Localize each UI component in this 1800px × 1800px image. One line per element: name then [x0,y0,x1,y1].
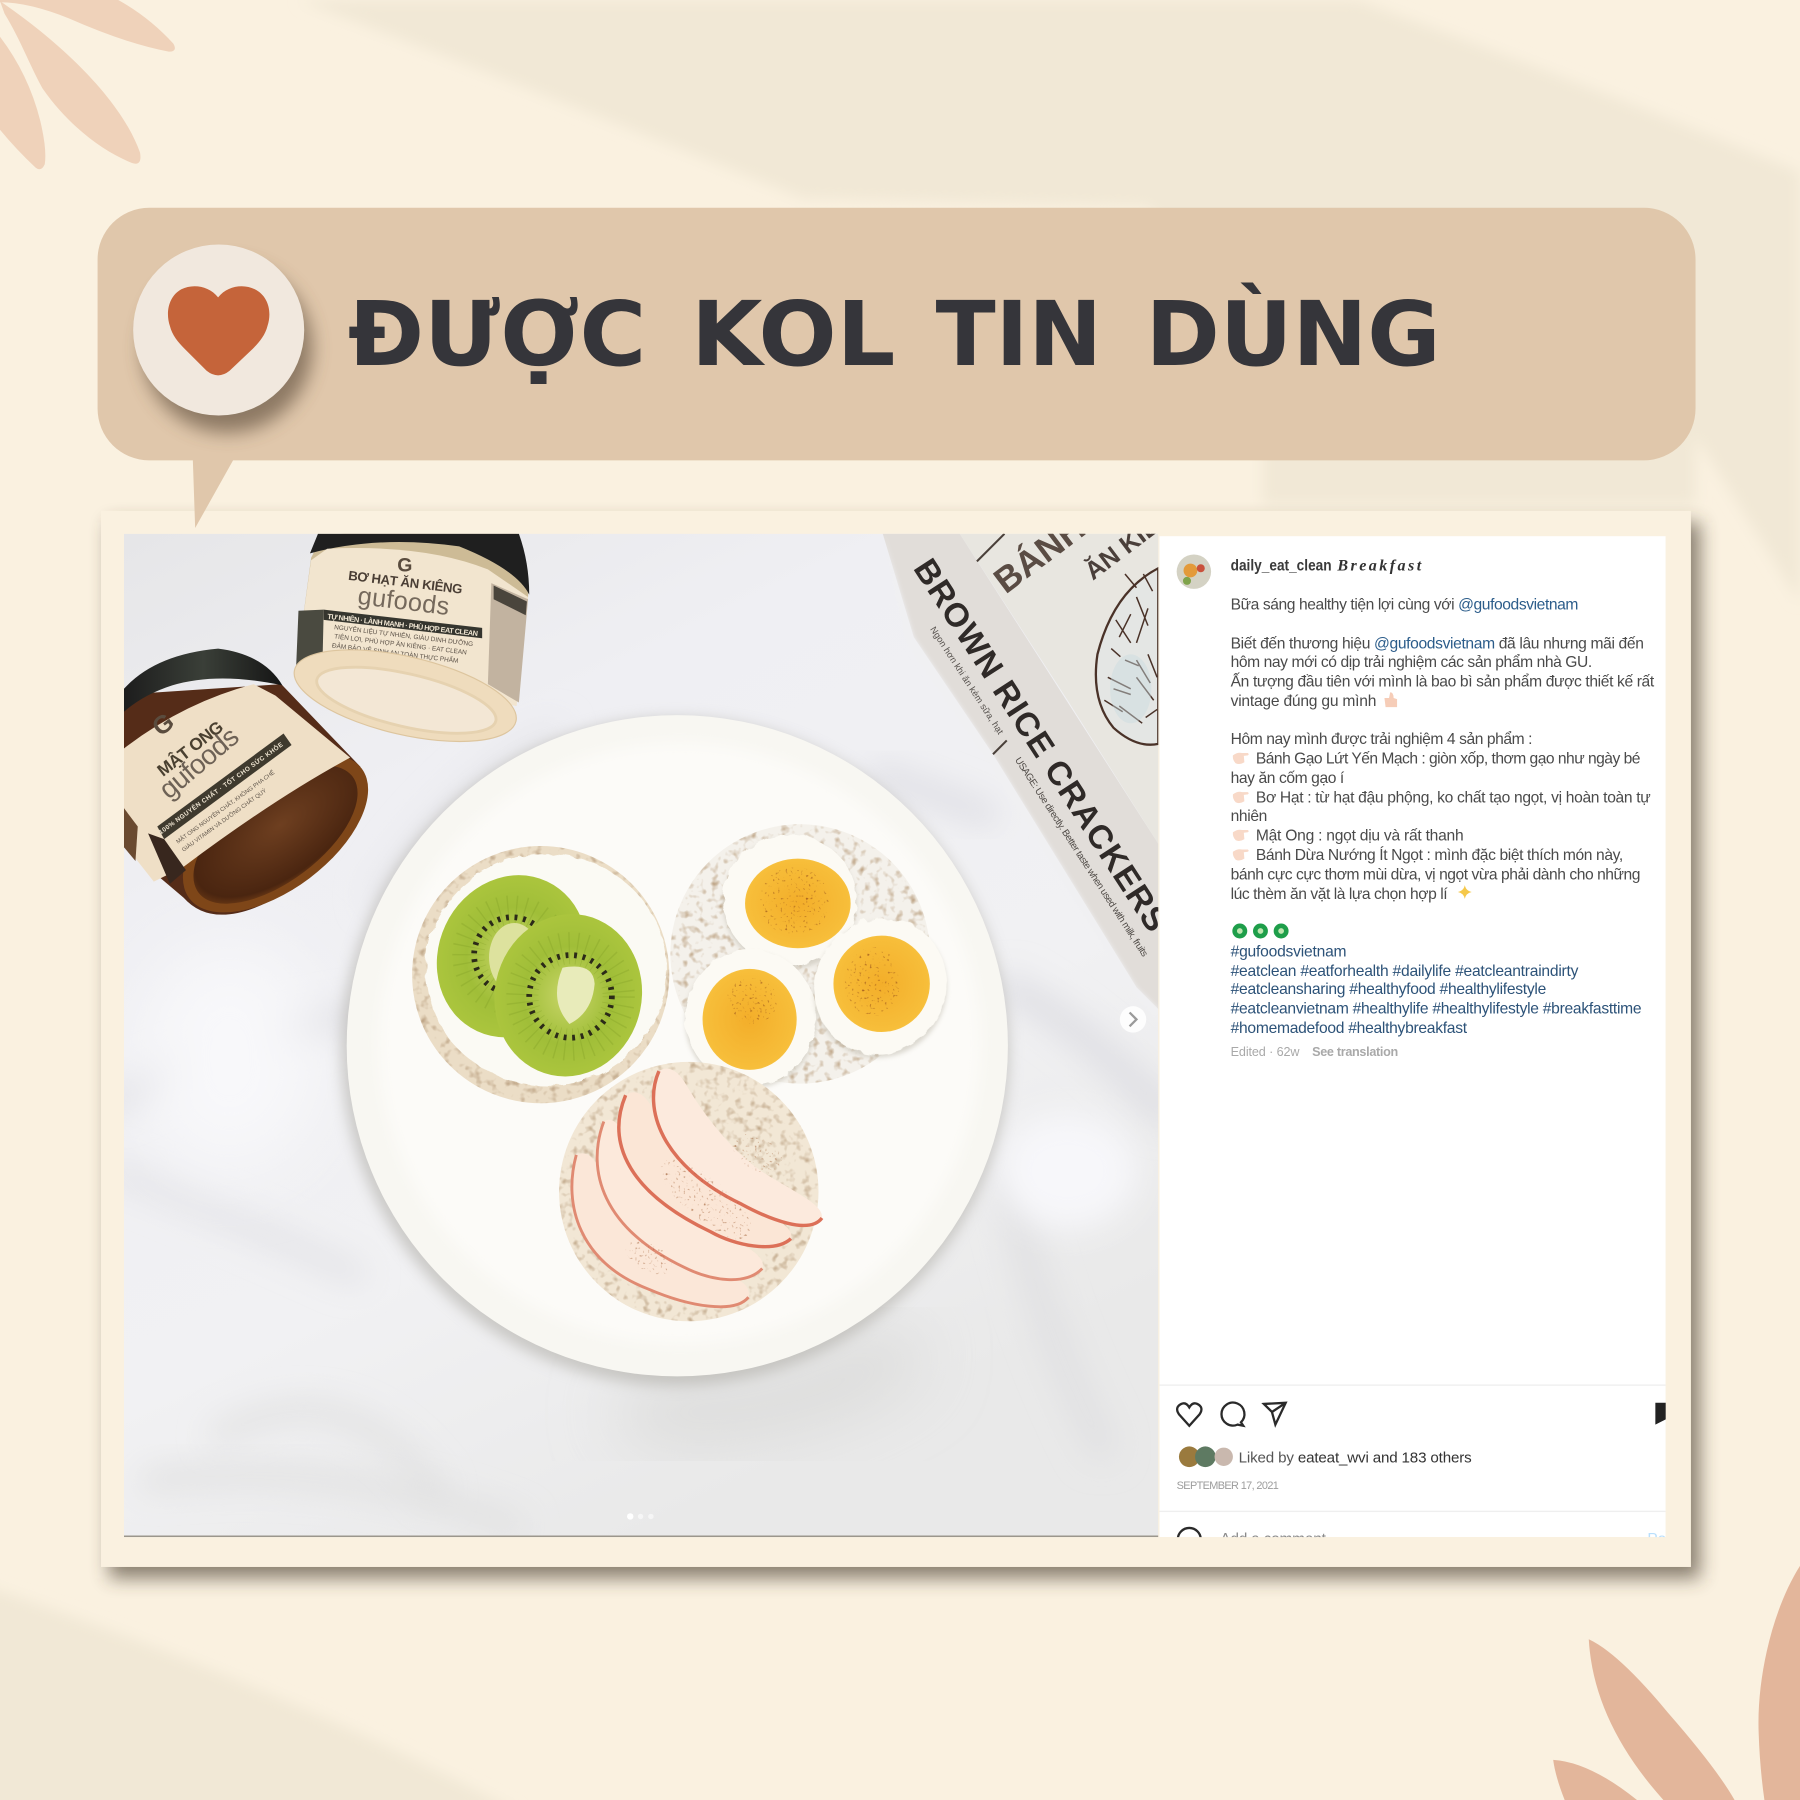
jar lid [310,534,529,595]
caption text: lúc thèm ăn vặt là lựa chọn hợp lí [1231,886,1448,903]
icon badge: heart [133,245,312,433]
jar: bo hat an kieng [294,534,530,742]
jar label text: MẬT ONG [153,717,227,780]
action icon: like [1177,1403,1201,1426]
jar label text: gufoods [153,720,245,805]
jar body [304,534,528,610]
hashtags: #eatclean #eatforhealth #dailylife #eatcleantraindirty [1231,963,1579,980]
hashtags: #gufoodsvietnam [1231,943,1347,960]
spine separator marks [977,534,1007,754]
avatar [1177,554,1211,589]
banner speech bubble [98,208,1696,528]
decorative leaves: top left [0,0,175,169]
slice three [597,1120,763,1280]
egg two [685,949,816,1088]
jar label text [327,555,478,665]
caption text: bánh cực cực thơm mùi dừa, vị ngọt vừa phải dành cho những [1231,866,1640,883]
decorative leaves: bottom right [1553,1566,1800,1800]
caption text: hôm nay mới có dịp trải nghiệm các sản phẩm nhà GU. [1231,653,1592,671]
caption text: Bữa sáng healthy tiện lợi cùng với @gufoodsvietnam [1231,597,1578,614]
slice one [653,1069,822,1225]
caption text: vintage đúng gu mình [1231,693,1376,710]
front label: BÁNH [986,507,1093,601]
username: daily_eat_clean [1231,558,1332,575]
rice illustration [1096,568,1158,745]
action icon: share [1264,1403,1286,1425]
slice two [619,1092,791,1247]
title: DÙNG [1146,282,1441,387]
hashtags: #eatcleansharing #healthyfood #healthylifestyle [1231,981,1546,998]
package: brown rice crackers: ĂN KIÊNG [1078,487,1195,586]
jar label [124,684,350,882]
slice four [572,1153,749,1307]
caption text: Ấn tượng đầu tiên với mình là bao bì sản phẩm được thiết kế rất [1231,671,1655,690]
cinnamon dust [620,1126,790,1282]
caption text: Mật Ong : ngọt dịu và rất thanh [1256,827,1464,844]
package spine [883,534,1158,1009]
liked by text: Liked by eateat_wvi and 183 others [1239,1450,1472,1467]
kiwi green dots [1232,924,1289,938]
package: brown rice crackers: USAGE: Use directly. Better taste when used with milk, fruits [1012,756,1150,959]
caption text: Biết đến thương hiệu @gufoodsvietnam đã lâu nhưng mãi đến [1231,636,1644,653]
hashtags: #homemadefood #healthybreakfast [1231,1020,1468,1037]
cracker: kiwi [410,846,669,1103]
jar label text: TỰ NHIÊN · LÀNH MẠNH · PHÙ HỢP EAT CLEAN [327,612,478,638]
carousel next button [1120,1006,1146,1033]
jar label text: 100% NGUYÊN CHẤT · TỐT CHO SỨC KHỎE [156,739,285,836]
jar label text: TIỆN LỢI, PHÙ HỢP ĂN KIÊNG · EAT CLEAN [334,631,468,657]
spine text: BROWN RICE CRACKERS [906,552,1175,938]
carousel dots [627,1513,654,1520]
add a comment row: Po [1647,1531,1666,1548]
add a comment row [1178,1528,1666,1551]
title: ĐƯỢC [348,283,646,387]
cracker: apple [559,1062,822,1321]
caption text: nhiên [1231,808,1267,825]
jar label text: G [397,555,412,577]
emoji icons [1233,692,1472,899]
edited meta: See translation [1312,1045,1398,1059]
background: soft leaf shadow bottom [0,1583,520,1800]
rice cake [559,1062,818,1321]
jar label text: GIÀU VITAMIN VÀ DƯỠNG CHẤT QUÝ [181,787,268,853]
jar label text: G [147,708,180,742]
package: brown rice crackers [883,534,1158,1008]
jar label text: ĐẢM BẢO VỆ SINH AN TOÀN THỰC PHẨM [332,641,459,665]
jar base: honey [183,758,368,912]
edited meta [1231,1045,1398,1059]
jar label text: MẬT ONG NGUYÊN CHẤT, KHÔNG PHA CHẾ [174,768,276,845]
frame [101,511,1691,1567]
jar label band [324,610,482,638]
caption text: Bơ Hạt : từ hạt đậu phộng, ko chất tạo ngọt, vị hoàn toàn tự [1256,789,1651,806]
post side panel [1159,536,1667,1551]
package: brown rice crackers: Ngon hơn khi ăn kèm sữa, hạt [928,625,1006,736]
title: KOL [691,283,895,387]
username: Breakfast [1336,558,1422,575]
jar: mat ong [124,648,368,915]
framed instagram post [101,487,1700,1578]
jar label band [157,734,292,839]
hashtags [1231,943,1642,1037]
title [348,282,1441,387]
fabric folds [115,735,1165,1527]
cream [426,854,667,1086]
fabric background [124,534,1158,1537]
cracker: egg [670,824,972,1088]
kiwi slice one [410,850,614,1062]
username [1231,558,1422,575]
egg three [789,894,972,1082]
jar label text [154,715,284,851]
jar base [294,649,517,742]
title: TIN [936,283,1102,387]
egg one [723,835,856,969]
caption text: Bánh Gạo Lứt Yến Mạch : giòn xốp, thơm gạo như ngày bé [1256,750,1640,767]
hashtags: #eatcleanvietnam #healthylife #healthylifestyle #breakfasttime [1231,1001,1642,1018]
apple slices [572,1069,822,1307]
jar lid [124,649,282,712]
edited meta: Edited · 62w [1231,1045,1300,1059]
caption text: Bánh Dừa Nướng Ít Ngọt : mình đặc biệt thích món này, [1256,845,1623,864]
kiwi slice two [479,900,657,1090]
jar label text: NGUYÊN LIỆU TỰ NHIÊN, GIÀU DINH DƯỠNG [334,622,474,648]
jar label text: BƠ HẠT ĂN KIÊNG [347,568,463,597]
plate [341,715,1009,1386]
jar glass body [124,684,360,915]
date: SEPTEMBER 17, 2021 [1177,1480,1279,1492]
liked by avatars [1179,1446,1233,1467]
package front [960,534,1158,844]
jar side panels [296,610,324,666]
heading banner [98,208,1696,528]
frame shadow [109,522,1700,1578]
add a comment row: Add a comment [1220,1531,1327,1548]
action icon: bookmark [1655,1403,1667,1425]
caption text: Hôm nay mình được trải nghiệm 4 sản phẩm : [1231,730,1533,748]
photo [115,487,1195,1537]
jar label text: gufoods [356,582,451,621]
action icon: comment [1221,1403,1244,1426]
caption text: hay ăn cốm gạo í [1231,770,1345,787]
jar label [296,548,528,706]
rice cake [670,824,930,1084]
background: soft leaf shadow top [298,0,1800,603]
rice cake [412,846,669,1103]
caption text [1231,597,1655,903]
